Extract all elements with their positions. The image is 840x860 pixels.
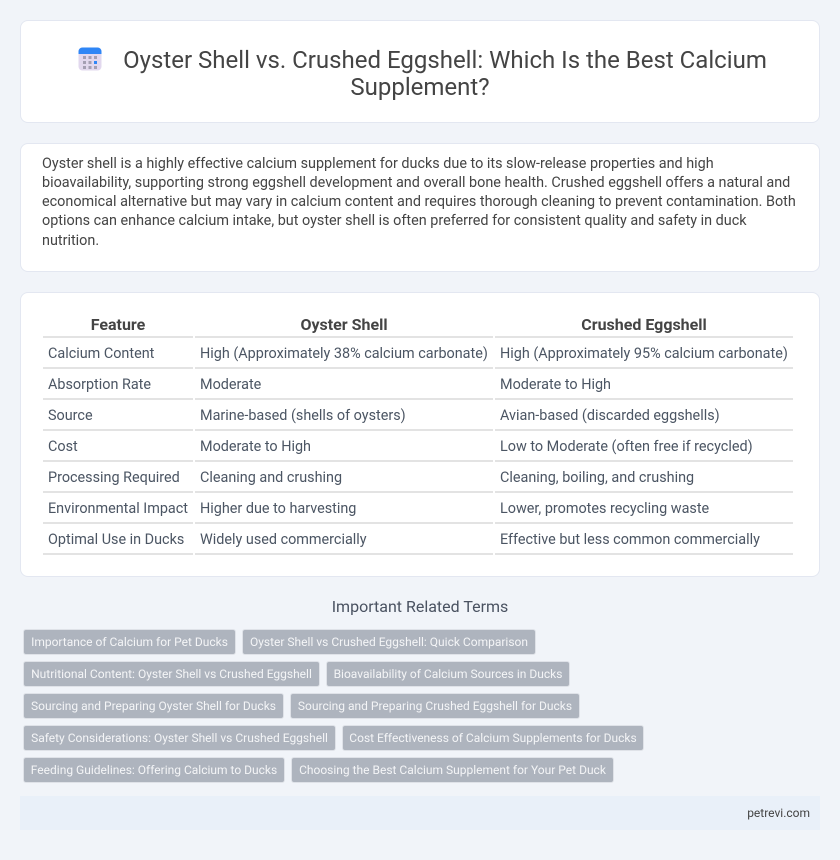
row: processing required: Cleaning and crushing [200, 469, 342, 486]
row: cost: Cost [48, 438, 78, 455]
row: cost: Moderate to High [200, 438, 311, 455]
row: source: Marine-based (shells of oysters) [200, 407, 406, 424]
intro paragraph [42, 155, 796, 249]
title [123, 46, 767, 101]
tag [23, 629, 236, 655]
icon: calendar [78, 48, 102, 70]
tag: Nutritional Content: Oyster Shell vs Crushed Eggshell [31, 667, 312, 681]
intro paragraph: economical alternative but may vary in calcium content and requires thorough cleaning to prevent contamination. Both [42, 193, 796, 210]
row: optimal use in ducks: Effective but less common commercially [500, 531, 760, 548]
row: absorption rate [43, 376, 793, 400]
table header: Feature [91, 315, 145, 334]
tag: Sourcing and Preparing Crushed Eggshell for Ducks [298, 699, 572, 713]
tag [23, 757, 285, 783]
row: optimal use in ducks: Widely used commercially [200, 531, 367, 548]
tag [23, 693, 284, 719]
tag: Feeding Guidelines: Offering Calcium to Ducks [31, 763, 277, 777]
row: absorption rate: Moderate [200, 376, 261, 393]
row: calcium content: Calcium Content [48, 345, 154, 362]
panel: intro text [20, 143, 820, 272]
tag: Safety Considerations: Oyster Shell vs Crushed Eggshell [31, 731, 328, 745]
tag: Oyster Shell vs Crushed Eggshell: Quick Comparison [250, 635, 528, 649]
row: processing required: Cleaning, boiling, and crushing [500, 469, 694, 486]
related terms heading: Important Related Terms [332, 597, 508, 616]
tag [23, 661, 320, 687]
row: processing required [43, 469, 793, 493]
title: Supplement? [350, 73, 490, 101]
header panel [20, 20, 820, 123]
tag: Bioavailability of Calcium Sources in Ducks [334, 667, 562, 681]
table header: Crushed Eggshell [581, 315, 707, 334]
tag: Cost Effectiveness of Calcium Supplements for Ducks [349, 731, 637, 745]
related terms tags [23, 629, 644, 783]
intro paragraph: options can enhance calcium intake, but oyster shell is often preferred for consistent quality and safety in duck [42, 212, 747, 229]
row: absorption rate: Moderate to High [500, 376, 611, 393]
row: environmental impact: Lower, promotes recycling waste [500, 500, 709, 517]
tag: Choosing the Best Calcium Supplement for Your Pet Duck [299, 763, 606, 777]
intro paragraph: Oyster shell is a highly effective calcium supplement for ducks due to its slow-release properties and high [42, 155, 714, 172]
row: optimal use in ducks: Optimal Use in Ducks [48, 531, 184, 548]
row: source: Avian-based (discarded eggshells) [500, 407, 720, 424]
tag [242, 629, 536, 655]
tag: Sourcing and Preparing Oyster Shell for Ducks [31, 699, 276, 713]
row: optimal use in ducks [43, 531, 793, 555]
row: calcium content: High (Approximately 38% calcium carbonate) [200, 345, 488, 362]
row: cost: Low to Moderate (often free if recycled) [500, 438, 753, 455]
intro paragraph: nutrition. [42, 232, 99, 249]
row: source [43, 407, 793, 431]
title: Oyster Shell vs. Crushed Eggshell: Which Is the Best Calcium [123, 46, 767, 74]
panel: comparison table [20, 292, 820, 577]
row: environmental impact: Higher due to harvesting [200, 500, 356, 517]
tag [291, 757, 614, 783]
tag [290, 693, 580, 719]
row: cost [43, 438, 793, 462]
row: environmental impact [43, 500, 793, 524]
row: calcium content: High (Approximately 95% calcium carbonate) [500, 345, 788, 362]
footer bar [20, 796, 820, 830]
tag [23, 725, 336, 751]
table header: Oyster Shell [300, 315, 388, 334]
table header [43, 315, 793, 338]
tag [342, 725, 644, 751]
row: source: Source [48, 407, 93, 424]
tag: Importance of Calcium for Pet Ducks [31, 635, 228, 649]
row: environmental impact: Environmental Impact [48, 500, 188, 517]
row: calcium content [43, 345, 793, 369]
tag [326, 661, 570, 687]
footer site name: petrevi.com [747, 806, 810, 820]
row: absorption rate: Absorption Rate [48, 376, 151, 393]
intro paragraph: bioavailability, supporting strong eggshell development and overall bone health. Crushed eggshell offers a natural and [42, 174, 790, 191]
row: processing required: Processing Required [48, 469, 180, 486]
